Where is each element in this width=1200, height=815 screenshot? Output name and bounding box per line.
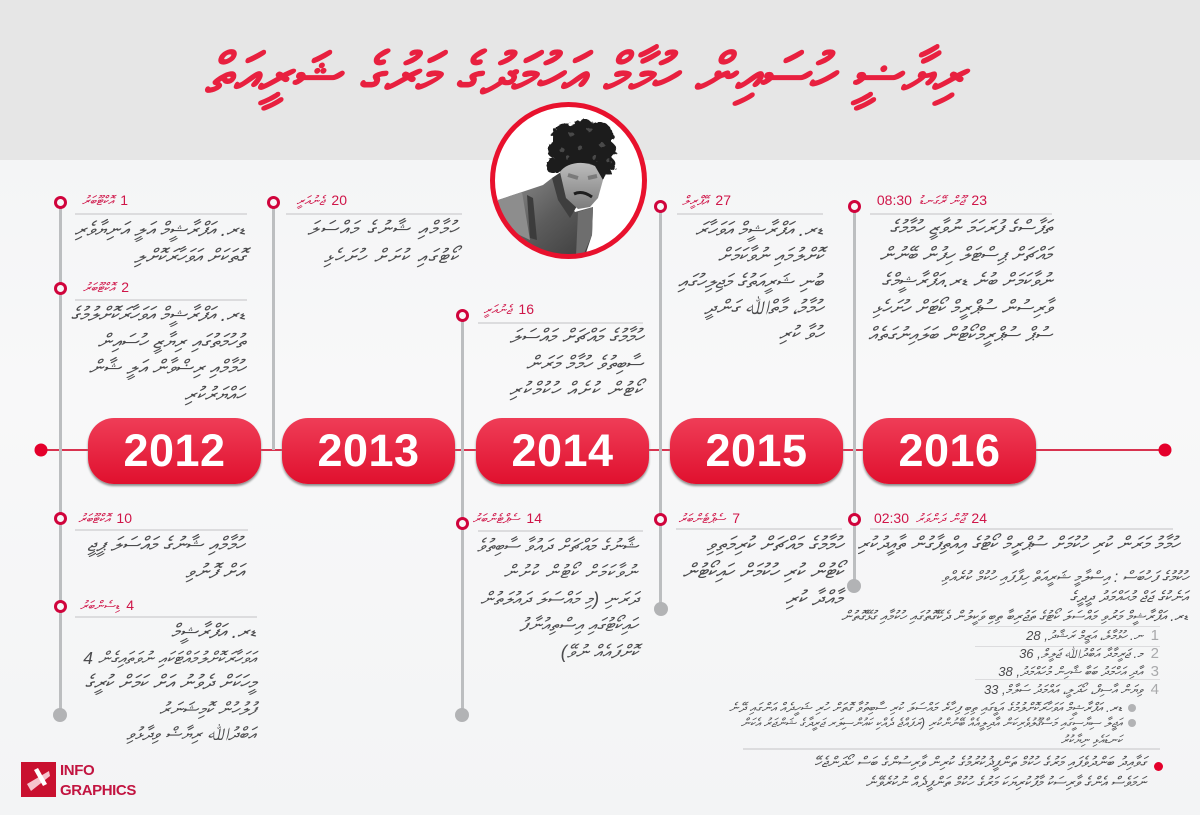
year pill 2015: 2015: [705, 425, 808, 476]
vertical stem 2014: [461, 318, 464, 715]
list of four judges: އާދި އަހްމަދު ބަބާ ޝާހިން މުހައްމަދު, 38: [998, 664, 1143, 679]
event: 14 September 2014: ޝާނުގެ މައްޗަށް ދައުވާ ސާބިތުވެ: [477, 535, 638, 556]
event: 2 October 2012: 2 އޮކްޓޫބަރު: [83, 279, 129, 295]
event: 16 January 2014: [478, 301, 646, 401]
event: 16 January 2014: 16 ޖެނުއަރީ: [484, 301, 534, 317]
timeline axis: [34, 444, 1172, 456]
event: 4 December 2012: މީހަކަށް ދެވުނު އަށް ކަމަށް ކުރީގެ: [85, 672, 256, 694]
year pill 2016: 2016: [898, 425, 1001, 476]
logo text: INFO: [60, 762, 94, 779]
event: 14 September 2014: 14 ސެޕްޓެންބަރު: [473, 510, 542, 526]
event: 20 January 2013: 20 ޖެނުއަރީ: [297, 192, 347, 208]
event: 24 June 2016 headline: ހުމާމު މަރަން ކުރި ހުކުމަށް ސުޕްރީމް ކޯޓުގެ އިއްތިފާގުން ތާއީދުކުރި: [857, 534, 1179, 555]
event: 20 January 2013: [286, 192, 462, 268]
marker: [654, 200, 667, 213]
event: 24 June 2016 headline: [857, 510, 1181, 556]
list of four judges: 3: [1151, 663, 1159, 680]
event: 7 September 2015: [676, 510, 848, 610]
event: 2 October 2012: [71, 279, 247, 406]
title: ރިޔާޟީ ހުސައިން ހުމާމް އަހުމަދުގެ މަރުގެ ޝަރީއަތް: [205, 42, 965, 105]
marker: [267, 196, 280, 209]
event: 7 September 2015: ހުމާމުގެ މައްޗަށް ކުރިމަތިވި: [706, 533, 843, 556]
event: 2 October 2012: ހުމާމްއި ރިޟްވާން އަލީ ޝާން: [89, 357, 245, 379]
bullet notes: އަޖީލާ ސިޔާސީގައި މަސްޤޫލުވެރިކަން އާދިލީއެއް ބޭނުންކުރި (ރަފައްޖެ ދެއްކި ކައުންސިލަރ ޖަރީދާގެ ޝަންޖަރު އެކަން: [741, 716, 1122, 730]
marker: [456, 517, 469, 530]
event: 10 October 2012: އަށް ފޮނުވި: [185, 561, 244, 583]
event: 10 October 2012: ހުމާމްއި ޝާނުގެ މައްސަލަ ޕީޖީ: [87, 534, 244, 556]
event: 27 April 2015: ކޮށްލުމައި ނުވާކަމަށް: [718, 245, 823, 267]
event: 1 October 2012: 1 އޮކްޓޫބަރު: [82, 192, 128, 208]
logo: info graphics: [21, 762, 136, 799]
event: 2 October 2012: ތުހުމަތުގައި ރިޔާޒީ ހުސައިން: [98, 330, 245, 352]
list of four judges: 1: [1151, 627, 1159, 644]
year pill 2014: 2014: [511, 425, 614, 476]
marker: [54, 600, 67, 613]
year pill 2016: [863, 418, 1036, 484]
event: 27 April 2015: ޑރ. އަފްރާޝީމް އަވަހާރަ: [695, 219, 823, 241]
event: 20 January 2013: ހުމާމްއި ޝާނުގެ މައްސަލަ: [307, 218, 459, 240]
vertical stem 2013: [272, 205, 275, 450]
year pill 2015: [670, 418, 843, 484]
event: 1 October 2012: [74, 192, 251, 268]
closing note: ނަމަވެސް އެންގެ ވާރިސަކު މާފުކުރިޔަކަ މަރުގެ ހުކުމް ތަންފީޛެއް ނުކުރެވޭނެ: [866, 775, 1146, 791]
event: 23 June 2016: ތަފާސްގެ ފުރަހަމަ ނުވާޒީ ހުމާމުގެ: [890, 217, 1052, 239]
end dot 2012: [53, 708, 67, 722]
event: 10 October 2012: 10 އޮކްޓޫބަރު: [78, 510, 132, 526]
end dot 2016: [847, 579, 861, 593]
closing note: ގަވާއިދު ބަންދުވެފައި މަރުގެ ހުކުމް ތަންފީޛުކުރުމުގެ ކުރިން ވާރިސުންގެ ބަސް ހޯދަންޖެހޭ: [814, 755, 1146, 771]
vertical stem 2015: [659, 209, 662, 609]
marker: [848, 200, 861, 213]
event: 7 September 2015: ކޯޓުން ކުރި ހުކުމަށް ހައިކޯޓުން: [683, 560, 843, 583]
vertical stem 2012: [59, 205, 62, 715]
end dot 2014: [455, 708, 469, 722]
event: 7 September 2015: 7 ސެޕްޓެންބަރު: [679, 510, 740, 526]
logo text: [60, 762, 136, 799]
list of four judges: މ. ޖަރީމާދާ އަބްދުﷲ ޖަލީލް, 36: [1019, 646, 1143, 661]
logo text: GRAPHICS: [60, 782, 136, 799]
closing note: [814, 754, 1163, 792]
event: 14 September 2014: ކޮށްފައެއް ނުވޭ): [561, 641, 638, 662]
event: 4 December 2012: އަވަހާރަކޮށްލުމައްޓަކައި ނުވަތައިގެން 4: [83, 648, 256, 668]
event: 16 January 2014: ހުމާމުގެ މައްޗަށް މައްސަލަ: [509, 326, 643, 348]
event: 4 December 2012: އަބްދުﷲ ރިޔާޟް ވިދާޅުވި: [126, 724, 256, 744]
end dot 2015: [654, 602, 668, 616]
event: 23 June 2016: ނުވާކަމަށް ބުނެ ޑރ.އަފްރާޝީމްގެ: [881, 270, 1052, 292]
event: 23 June 2016: [868, 192, 1056, 347]
event: 1 October 2012: ޑރ. އަފްރާޝީމް އަލީ އަނިޔާވެރި: [74, 219, 245, 241]
year pill 2012: [88, 418, 261, 484]
event: 2 October 2012: ޑރ. އަފްރާޝީމް އަވަހާރަކޮށްލުމުގެ: [71, 304, 245, 326]
event: 14 September 2014: ހައިކޯޓުގައި އިސްތިއުނާފު: [519, 614, 638, 635]
vertical stem 2016: [853, 209, 856, 586]
event: 27 April 2015: [677, 192, 828, 345]
bullet notes: ކަނޑައެޅި ނިޔާކުރު: [1061, 733, 1122, 747]
portrait photo: [490, 102, 647, 259]
event: 14 September 2014: ދަރަނި (މި މައްސަލަ ދައުލަތުން: [480, 588, 638, 609]
event: 4 December 2012: [75, 597, 260, 744]
verdict details: [841, 568, 1190, 626]
event: 16 January 2014: ކޯޓުން ކުށެއް ހުކުމްކުރި: [509, 379, 643, 401]
event: 27 April 2015: ބުނި ޝަރީއަތުގެ މަޖިލިހުގައި: [678, 271, 823, 293]
year pill 2013: [282, 418, 455, 484]
event: 10 October 2012: [75, 510, 248, 583]
event: 14 September 2014: ނުވާކަމަށް ކޯޓުން ކުށުން: [504, 561, 638, 582]
event: 4 December 2012: ޑރ. އަފްރާޝީމް: [171, 621, 256, 643]
event: 23 June 2016: ވާރިސުން ސުޕްރީމް ކޯޓަށް ހުށަހެޅި: [873, 297, 1052, 319]
bullet notes: [729, 700, 1136, 747]
event: 23 June 2016: މައްޗަށް ޕިސްޓަލް ހިފުން ބޭނުން: [880, 244, 1052, 266]
list of four judges: 4: [1151, 681, 1159, 698]
event: 24 June 2016 headline: 24 ޖޫން ދަންވަރު 02:30: [874, 510, 987, 526]
event: 1 October 2012: ގޮތަކަށް އަވަހާރަކޮށްލި: [134, 246, 245, 268]
verdict details: ހުކުމުގެ ފަހުބަސް : އިސްލާމީ ޝަރީއަތް ހިފާފައި ހުކުމް ކުރެއްވި: [941, 569, 1188, 586]
event: 27 April 2015: ހުވާ ކުރި: [779, 323, 823, 345]
event: 4 December 2012: ފުލުހުން ކޮމިޝަނަރު: [159, 698, 256, 718]
year pill 2012: 2012: [123, 425, 226, 476]
event: 23 June 2016: 23 ޖޫން ރޭގަނޑު 08:30: [877, 192, 987, 208]
bullet notes: ޑރ. އަފްރާޝީމް އަވަހާރަކޮށްލުމުގެ އަޑީގައި ތިބި ފިހާރެ މައްސަލަ ކުރި ސާބިތުވާ ގޮތަށް ހުރި ޝަހީދެއް އަންގައި ދޭނެ: [729, 700, 1122, 715]
event: 27 April 2015: ހުމާމު، މާތްﷲ ގަންދީ: [704, 297, 823, 319]
event: 4 December 2012: 4 ޑިސެންބަރު: [80, 597, 134, 613]
year pill 2014: [476, 418, 649, 484]
event: 27 April 2015: 27 އޭޕްރީލް: [682, 192, 731, 208]
list of four judges: ނ. ހުޅުމާލެ، އަޒީމް ރަޝާދު, 28: [1026, 628, 1143, 643]
event: 2 October 2012: ހައްޔަރުކުރި: [184, 384, 245, 406]
verdict details: ޑރ. އަފްރާޝީމް މަރުވި މައްސަލަ ކޯޓުގެ ތަޖުރިބާ ތިބި ވަކީލުން ދެކޭގޮތުގައި ހުކުމާއި ގުޅޭގޮތުން: [841, 609, 1188, 625]
event: 14 September 2014: [473, 510, 643, 662]
marker: [456, 309, 469, 322]
event: 23 June 2016: ސުޕް ސުޕްރީމްކޯޓުން ބަލައިނުގަތެއް: [868, 324, 1052, 346]
event ring markers: [54, 196, 67, 209]
list of four judges: ވިޔަން އާސިފް، ހޯދަލީ، އައްމަދު ސަލާމް, 33: [984, 682, 1143, 697]
event: 20 January 2013: ކޯޓުގައި ކުށަށް ހުށަހެޅި: [324, 246, 459, 268]
list of four judges: 2: [1151, 645, 1159, 662]
verdict details: އަނެކުގެ ޖަޖް މުޙައްމަދު ދީދީގެ: [1070, 589, 1188, 606]
logo mark: [21, 762, 56, 797]
event: 7 September 2015: މާއްދާ ކުރި: [785, 587, 843, 610]
list of four judges: [975, 626, 1160, 698]
marker: [54, 282, 67, 295]
marker: [54, 512, 67, 525]
marker: [848, 513, 861, 526]
year pill 2013: 2013: [317, 425, 420, 476]
marker: [654, 513, 667, 526]
event: 16 January 2014: ސާބިތުވެ ހުމާމް މަރަން: [526, 352, 643, 374]
